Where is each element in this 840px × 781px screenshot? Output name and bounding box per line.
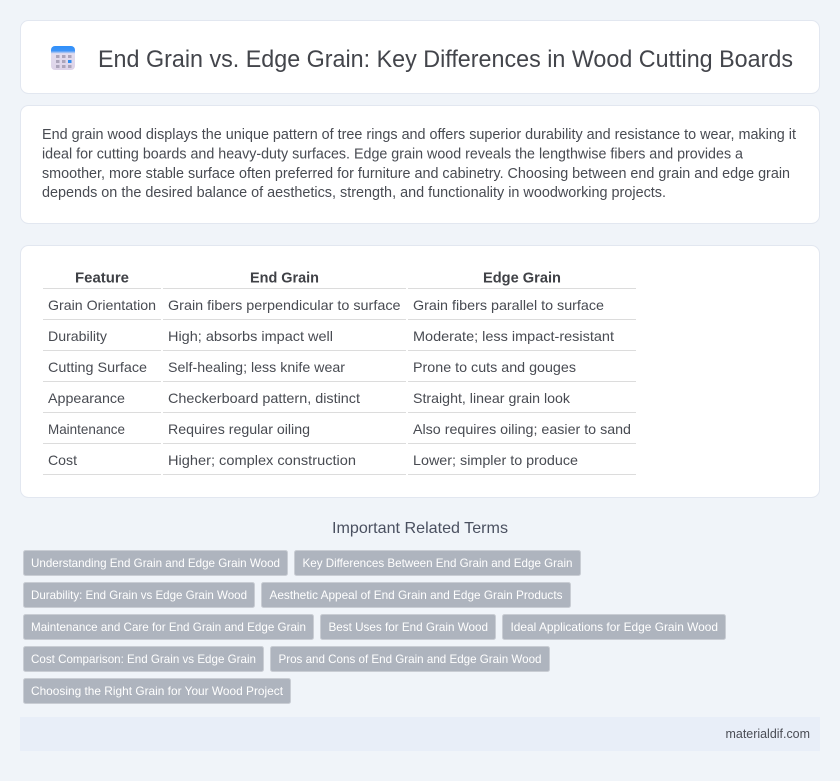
tag: Maintenance and Care for End Grain and Edge Grain (31, 620, 306, 634)
table header: End Grain (250, 270, 319, 287)
tag: Choosing the Right Grain for Your Wood Project (31, 684, 284, 698)
title: End Grain vs. Edge Grain: Key Differences in Wood Cutting Boards (98, 46, 793, 73)
tag: Durability: End Grain vs Edge Grain Wood (31, 588, 247, 602)
tag: Key Differences Between End Grain and Edge Grain (302, 556, 572, 570)
row: durability: High; absorbs impact well (168, 328, 333, 344)
row: durability: Durability (48, 328, 107, 344)
footer source text: materialdif.com (726, 727, 810, 741)
intro text: smoother, more stable surface often preferred for furniture and cabinetry. Choosing between end grain and edge grain (42, 166, 790, 182)
row: cost: Higher; complex construction (168, 452, 356, 468)
related term tags (24, 550, 726, 704)
tag (320, 614, 496, 640)
tag (24, 646, 264, 672)
footer (20, 717, 820, 751)
row: appearance: Appearance (48, 390, 125, 406)
tag (270, 646, 550, 672)
row: durability: Moderate; less impact-resistant (413, 328, 614, 344)
tag (294, 550, 580, 576)
row: maintenance: Requires regular oiling (168, 421, 310, 437)
tag (502, 614, 726, 640)
panel: header (20, 20, 820, 94)
row: appearance (48, 390, 571, 406)
row: grain orientation: Grain Orientation (48, 297, 156, 313)
row: appearance: Straight, linear grain look (413, 390, 571, 406)
row: cutting surface: Cutting Surface (48, 359, 147, 375)
panel: introduction (20, 106, 820, 224)
row: grain orientation (48, 297, 604, 313)
tag: Pros and Cons of End Grain and Edge Grain Wood (278, 652, 542, 666)
table header (75, 270, 561, 287)
row: cost (48, 452, 578, 468)
intro text: depends on the desired balance of aesthetics, strength, and functionality in woodworking projects. (42, 185, 666, 201)
row: cost: Cost (48, 452, 77, 468)
table header: Feature (75, 270, 129, 287)
row: cutting surface: Self-healing; less knife wear (168, 359, 345, 375)
tag (262, 582, 570, 608)
tag: Cost Comparison: End Grain vs Edge Grain (31, 652, 256, 666)
row: maintenance: Maintenance (48, 421, 125, 437)
row: grain orientation: Grain fibers perpendicular to surface (168, 297, 401, 313)
row: appearance: Checkerboard pattern, distinct (168, 390, 360, 406)
intro text (42, 127, 796, 201)
tag (24, 550, 288, 576)
tag (24, 614, 314, 640)
table header: Edge Grain (483, 270, 561, 287)
row: grain orientation: Grain fibers parallel to surface (413, 297, 604, 313)
intro text: End grain wood displays the unique pattern of tree rings and offers superior durability and resistance to wear, making it (42, 127, 796, 143)
intro text: ideal for cutting boards and heavy-duty surfaces. Edge grain wood reveals the lengthwise fibers and provides a (42, 146, 743, 162)
heading: related terms: Important Related Terms (332, 520, 508, 537)
tag: Best Uses for End Grain Wood (328, 620, 488, 634)
row: cutting surface: Prone to cuts and gouges (413, 359, 576, 375)
row: cutting surface (48, 359, 576, 375)
row: maintenance: Also requires oiling; easier to sand (413, 421, 631, 437)
row: cost: Lower; simpler to produce (413, 452, 578, 468)
panel: comparison table (20, 246, 820, 498)
row: durability (48, 328, 614, 344)
row: maintenance (48, 421, 631, 437)
tag: Understanding End Grain and Edge Grain Wood (31, 556, 280, 570)
tag: Aesthetic Appeal of End Grain and Edge Grain Products (270, 588, 562, 602)
tag (24, 582, 254, 608)
icon: calendar (51, 46, 75, 70)
tag: Ideal Applications for Edge Grain Wood (510, 620, 718, 634)
tag (24, 678, 290, 704)
